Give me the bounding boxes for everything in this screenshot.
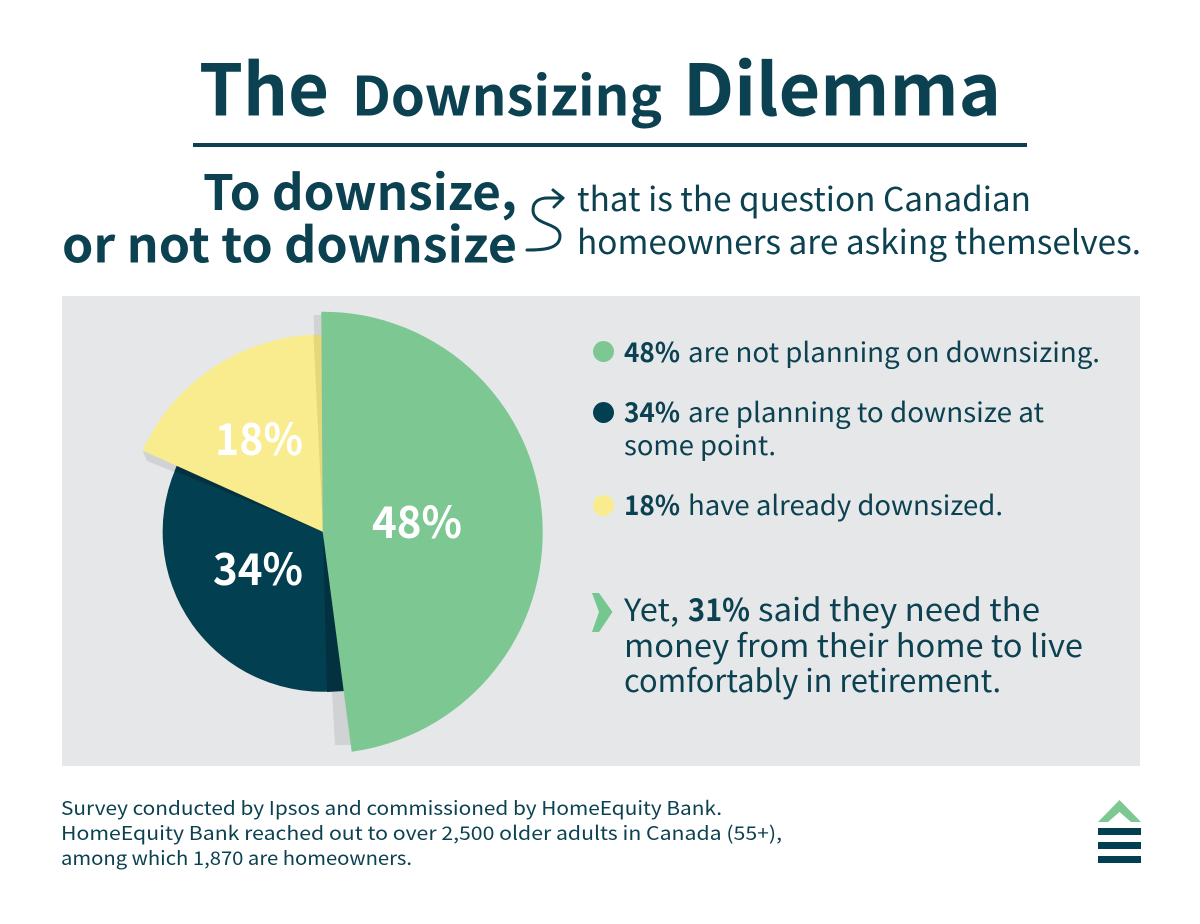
legend item: 34%: are planning to downsize at — [688, 391, 1044, 430]
pie chart — [143, 312, 543, 752]
legend item: 18%: have already downsized. — [688, 484, 1003, 523]
legend item: 34%: some point. — [624, 424, 776, 463]
icon: s-curve arrow — [527, 190, 563, 250]
subtitle: explanation: that is the question Canadian — [577, 173, 1031, 221]
title: Downsizing — [352, 52, 662, 132]
slice: 18% already downsized — [143, 334, 323, 532]
subtitle: question: or not to downsize — [62, 206, 517, 276]
legend item: 34%: 34% — [624, 391, 680, 430]
shadow of green slice on panel — [314, 315, 352, 745]
footer: source note: HomeEquity Bank reached out to over 2,500 older adults in Canada (55+), — [61, 819, 782, 846]
legend item: 48%: are not planning on downsizing. — [688, 331, 1100, 370]
pie labels: 34% — [213, 534, 303, 598]
subtitle: question: To downsize, — [203, 154, 517, 224]
pie labels — [213, 404, 462, 598]
title: The — [199, 34, 329, 136]
icon: green chevron — [592, 593, 612, 632]
subtitle: question — [62, 154, 517, 276]
footer: source note — [61, 794, 782, 871]
callout: 31% need the money: said they need the — [758, 585, 1040, 630]
pie labels: 48% — [372, 487, 462, 551]
shadow of green slice on yellow — [314, 335, 323, 532]
shadow of yellow slice on panel — [143, 450, 323, 532]
shadow of green slice on navy — [323, 532, 345, 692]
callout: 31% need the money: 31% — [688, 585, 750, 630]
subtitle: explanation: homeowners are asking themselves. — [577, 216, 1141, 264]
shadow of yellow slice on navy — [175, 465, 323, 532]
callout: 31% need the money: Yet, — [623, 585, 679, 630]
slice: 48% not planning — [321, 312, 543, 752]
legend item: 48%: 48% — [624, 331, 680, 370]
callout: 31% need the money — [623, 585, 1083, 701]
callout: 31% need the money: money from their home to live — [624, 621, 1083, 666]
title: Dilemma — [683, 34, 1001, 136]
panel: survey results — [62, 296, 1140, 766]
footer: source note: Survey conducted by Ipsos and commissioned by HomeEquity Bank. — [61, 794, 722, 821]
pie labels: 18% — [215, 404, 303, 468]
slice: 34% planning to downsize — [163, 459, 345, 692]
subtitle: explanation — [577, 173, 1141, 264]
footer: source note: among which 1,870 are homeowners. — [61, 844, 412, 871]
icon: HomeEquity logo — [1098, 800, 1141, 863]
legend item: 34% — [593, 391, 1044, 463]
legend item: 18%: 18% — [624, 484, 680, 523]
callout: 31% need the money: comfortably in retirement. — [624, 656, 1001, 701]
title — [199, 34, 1001, 136]
